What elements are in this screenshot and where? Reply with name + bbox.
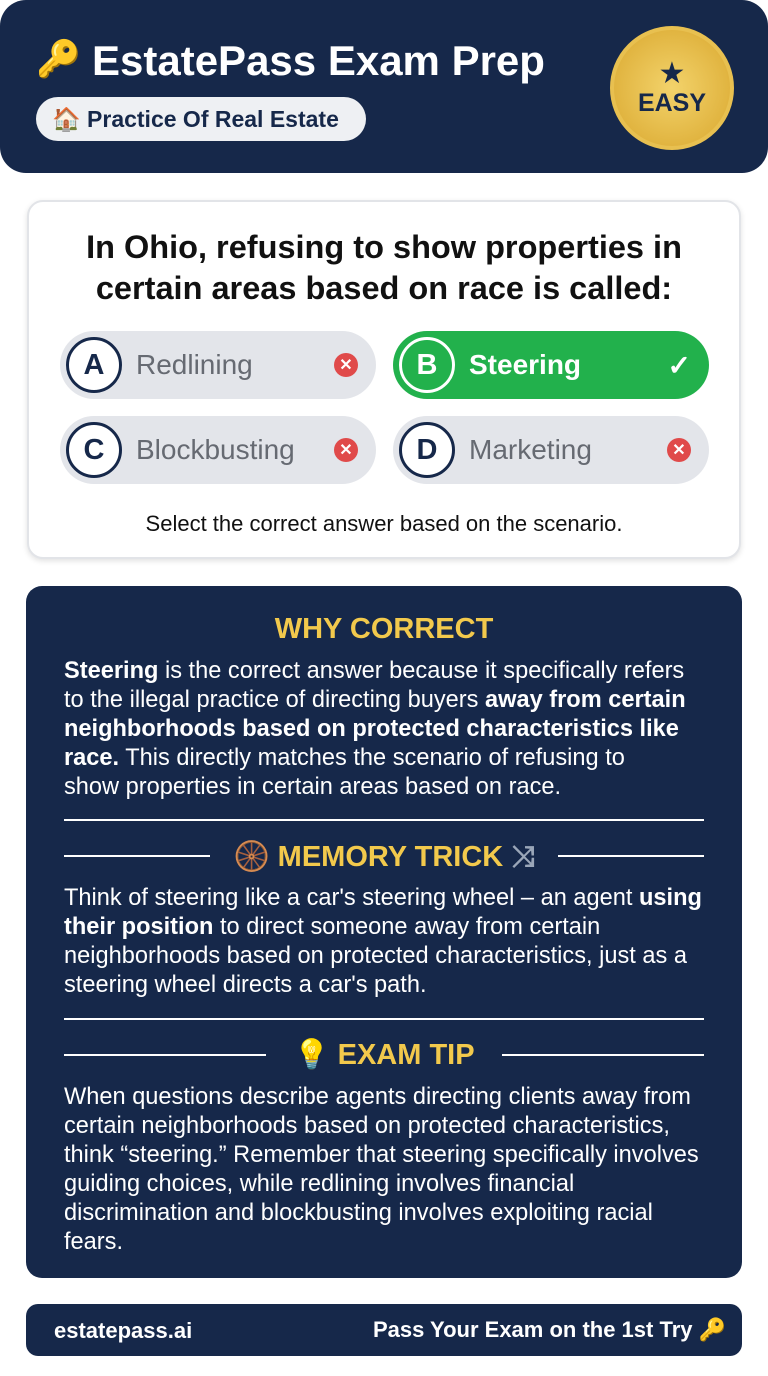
option C: ✕ (339, 442, 353, 459)
question text: certain areas based on race is called: (96, 270, 672, 306)
option D (393, 416, 709, 484)
option D: ✕ (672, 442, 686, 459)
option A: A (84, 348, 104, 380)
badge: easy (610, 26, 734, 150)
heading: exam tip: 💡 EXAM TIP (293, 1039, 475, 1071)
option B correct (393, 331, 709, 399)
option A: ✕ (339, 357, 353, 374)
why correct text (64, 658, 686, 800)
why correct text: Steering is the correct answer because it specifically refers (64, 658, 684, 684)
memory trick text: steering wheel directs a car's path. (64, 972, 427, 998)
why correct text: show properties in certain areas based on race. (64, 774, 561, 800)
instruction: Select the correct answer based on the scenario. (146, 511, 622, 536)
option C: Blockbusting (136, 434, 295, 465)
icon: key: 🔑 (36, 38, 81, 79)
memory trick text: Think of steering like a car's steering wheel – an agent using (64, 885, 702, 911)
exam tip text: discrimination and blockbusting involves exploiting racial (64, 1200, 653, 1226)
why correct text: race. This directly matches the scenario of refusing to (64, 745, 625, 771)
option D: Marketing (469, 434, 592, 465)
option C: C (84, 434, 104, 466)
option A: Redlining (136, 349, 253, 380)
exam tip text (64, 1084, 699, 1255)
exam tip text: When questions describe agents directing clients away from (64, 1084, 691, 1110)
why correct text: to the illegal practice of directing buyers away from certain (64, 687, 686, 713)
title: EstatePass Exam Prep (92, 37, 545, 84)
memory trick text: their position to direct someone away from certain (64, 914, 600, 940)
option B correct: B (417, 348, 437, 380)
exam tip text: certain neighborhoods based on protected characteristics, (64, 1113, 670, 1139)
footer slogan: Pass Your Exam on the 1st Try 🔑 (373, 1317, 726, 1342)
footer (26, 1304, 742, 1356)
footer site: estatepass.ai (54, 1318, 192, 1343)
badge: easy: ★ (659, 56, 685, 90)
heading: memory trick: 🛞 MEMORY TRICK ⤨ (234, 841, 534, 873)
option D: D (417, 434, 437, 466)
question text: In Ohio, refusing to show properties in (86, 229, 682, 265)
exam tip text: guiding choices, while redlining involves financial (64, 1171, 574, 1197)
why correct text: neighborhoods based on protected characteristics like (64, 716, 679, 742)
badge: easy: EASY (638, 88, 706, 116)
question text (86, 229, 682, 306)
question card (27, 200, 741, 559)
memory trick text (64, 885, 702, 998)
header (0, 0, 768, 173)
heading: why correct: WHY CORRECT (275, 613, 493, 645)
option B correct: Steering (469, 349, 581, 380)
explanation panel (26, 586, 742, 1278)
category pill (36, 97, 366, 141)
option C (60, 416, 376, 484)
option A (60, 331, 376, 399)
category pill: 🏠 Practice Of Real Estate (52, 106, 339, 132)
exam tip text: think “steering.” Remember that steering specifically involves (64, 1142, 699, 1168)
exam tip text: fears. (64, 1229, 123, 1255)
option B correct: ✓ (668, 350, 691, 380)
memory trick text: neighborhoods based on protected characteristics, just as a (64, 943, 687, 969)
